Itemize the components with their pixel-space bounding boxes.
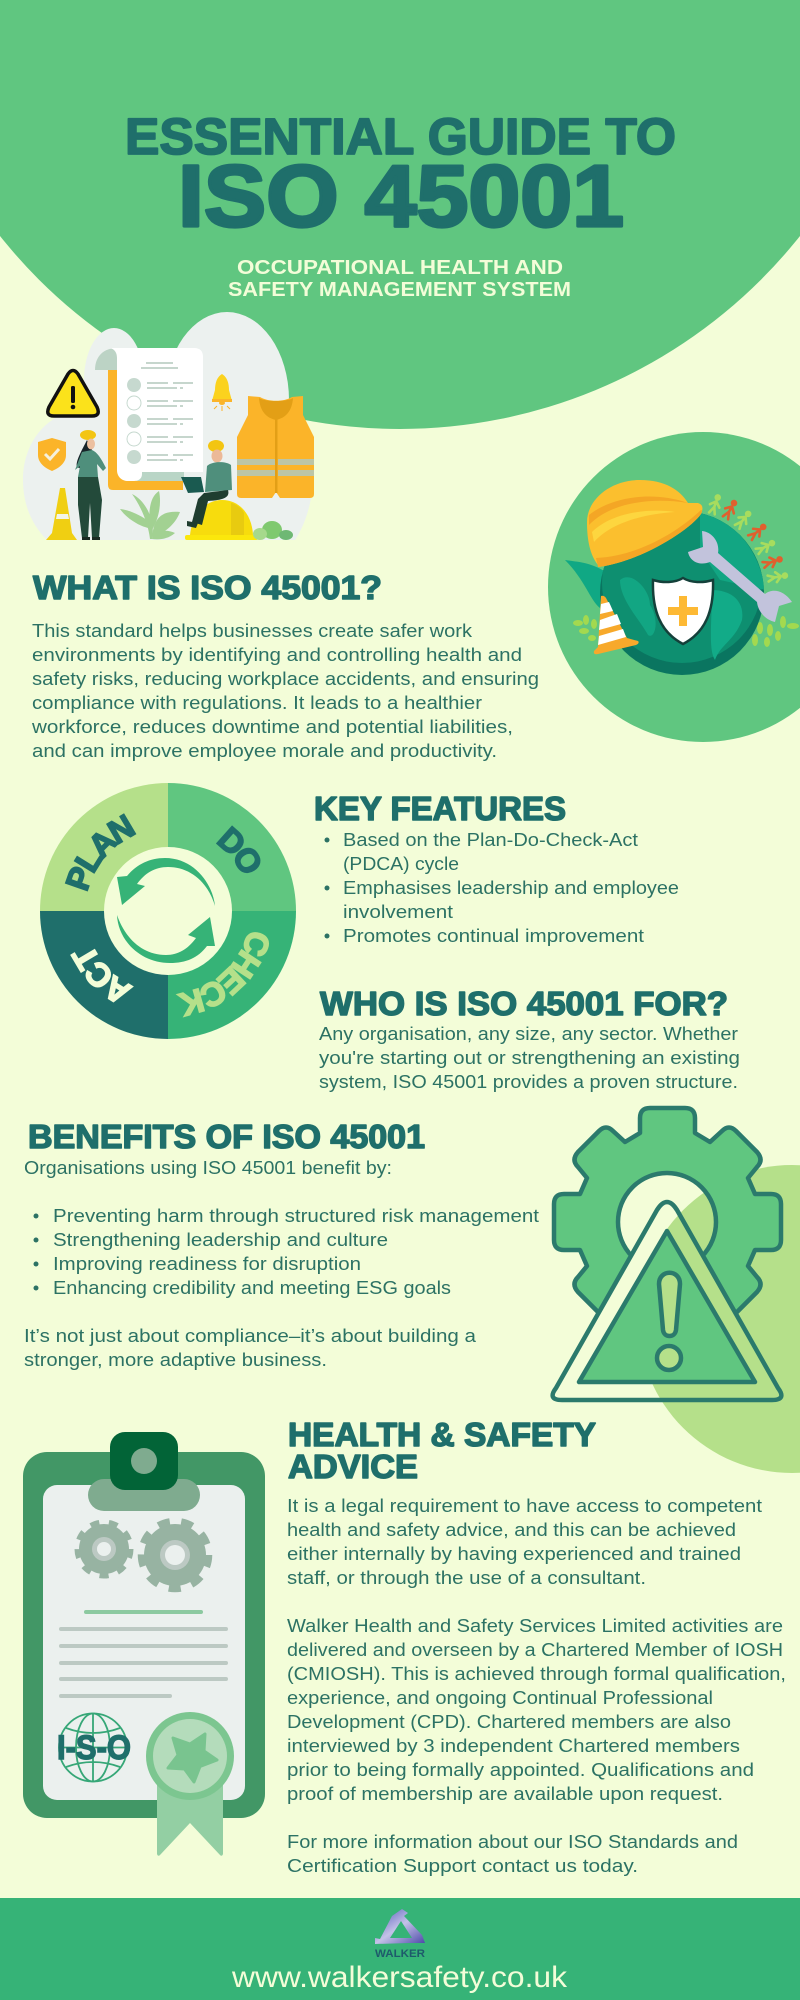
heading: WHAT IS ISO 45001? bbox=[33, 569, 382, 606]
heading: BENEFITS OF ISO 45001 bbox=[28, 1118, 425, 1155]
text block: legal requirement: It is a legal requirement to have access to competent bbox=[287, 1496, 762, 1516]
text block bbox=[319, 1024, 740, 1092]
illustration: safety checklist and workers bbox=[23, 312, 314, 540]
text block: Walker services: (CMIOSH). This is achieved through formal qualification, bbox=[287, 1664, 786, 1684]
bullet list: (PDCA) cycle bbox=[343, 854, 459, 874]
bullet list: Promotes continual improvement bbox=[343, 926, 644, 946]
traffic cone bbox=[46, 488, 77, 540]
warning triangle bbox=[553, 1202, 781, 1400]
label: check: CHECK bbox=[176, 932, 269, 1018]
text block: contact bbox=[287, 1832, 738, 1876]
text block: Walker services: experience, and ongoing Continual Professional bbox=[287, 1688, 713, 1708]
text block: Any organisation, any size, any sector. Whether bbox=[319, 1024, 738, 1044]
hard hat bbox=[587, 480, 702, 567]
bullet list bbox=[34, 1206, 539, 1298]
PDCA cycle wheel bbox=[40, 783, 296, 1039]
text block: and can improve employee morale and productivity. bbox=[32, 741, 497, 761]
text block: Organisations using ISO 45001 benefit by: bbox=[24, 1158, 392, 1178]
text block: Walker services: Development (CPD). Chartered members are also bbox=[287, 1712, 731, 1732]
text block: you're starting out or strengthening an existing bbox=[319, 1048, 740, 1068]
text block: Walker services: prior to being formally appointed. Qualifications and bbox=[287, 1760, 754, 1780]
text block: legal requirement bbox=[287, 1496, 762, 1588]
document lines bbox=[59, 1610, 228, 1698]
bullet list: Strengthening leadership and culture bbox=[53, 1230, 388, 1250]
big hard hat bbox=[185, 500, 258, 540]
subtitle: SAFETY MANAGEMENT SYSTEM bbox=[228, 278, 571, 301]
warning sign bbox=[48, 370, 98, 416]
logo: WALKER bbox=[375, 1948, 425, 1960]
bullet list: Based on the Plan-Do-Check-Act bbox=[343, 830, 638, 850]
label: do: DO bbox=[216, 826, 260, 874]
text block: safety risks, reducing workplace accidents, and ensuring bbox=[32, 669, 539, 689]
text block: legal requirement: staff, or through the use of a consultant. bbox=[287, 1568, 646, 1588]
bush bbox=[253, 521, 293, 540]
plant bbox=[120, 491, 180, 539]
text block: Walker services bbox=[287, 1616, 786, 1804]
shield bbox=[653, 578, 713, 644]
people ring bbox=[707, 494, 788, 583]
arrow: top bbox=[117, 858, 215, 906]
logo bbox=[375, 1909, 425, 1960]
panel: benefits bbox=[24, 1118, 539, 1370]
title bbox=[125, 108, 676, 245]
text block: environments by identifying and controlling health and bbox=[32, 645, 522, 665]
text block: compliance with regulations. It leads to a healthier bbox=[32, 693, 482, 713]
subtitle bbox=[228, 256, 571, 301]
text block: system, ISO 45001 provides a proven structure. bbox=[319, 1072, 738, 1092]
closing text bbox=[24, 1326, 477, 1370]
bell bbox=[212, 374, 232, 411]
bullet list: Improving readiness for disruption bbox=[53, 1254, 361, 1274]
arrow: bottom bbox=[117, 915, 215, 963]
bullet list: involvement bbox=[343, 902, 453, 922]
icon: gear with warning triangle bbox=[553, 1108, 781, 1400]
closing text: stronger, more adaptive business. bbox=[24, 1350, 327, 1370]
heading: WHO IS ISO 45001 FOR? bbox=[320, 985, 728, 1022]
text block: Walker services: Walker Health and Safety Services Limited activities are bbox=[287, 1616, 783, 1636]
illustration: globe with hard hat bbox=[548, 432, 800, 742]
leaves bbox=[565, 560, 799, 647]
scroll document bbox=[95, 348, 203, 490]
text block: contact: For more information about our ISO Standards and bbox=[287, 1832, 738, 1852]
text block bbox=[31, 621, 539, 761]
bullet list: Enhancing credibility and meeting ESG goals bbox=[53, 1278, 451, 1298]
bullet list: Emphasises leadership and employee bbox=[343, 878, 679, 898]
shield bbox=[38, 438, 66, 471]
globe bbox=[600, 503, 765, 675]
bullet list bbox=[324, 830, 679, 946]
safety vest bbox=[237, 396, 314, 498]
text block: workforce, reduces downtime and potential liabilities, bbox=[31, 717, 513, 737]
panel: what is ISO 45001 bbox=[31, 569, 539, 761]
traffic cone bbox=[594, 596, 639, 654]
closing text: It’s not just about compliance–it’s about building a bbox=[24, 1326, 477, 1346]
background circle: light green bbox=[638, 1165, 800, 1473]
wrench bbox=[688, 531, 792, 622]
ISO globe bbox=[57, 1713, 131, 1782]
worker: woman bbox=[75, 430, 106, 540]
label: act: ACT bbox=[70, 948, 134, 1002]
ISO globe: I-S-O bbox=[57, 1729, 131, 1767]
website url: www.walkersafety.co.uk bbox=[231, 1961, 568, 1994]
header circle bbox=[0, 0, 800, 429]
subtitle: OCCUPATIONAL HEALTH AND bbox=[237, 256, 563, 279]
text block: legal requirement: either internally by having experienced and trained bbox=[287, 1544, 741, 1564]
gears bbox=[78, 1522, 208, 1588]
title: ISO 45001 bbox=[178, 148, 624, 245]
icon: clipboard with ISO certificate bbox=[23, 1432, 265, 1856]
title: ESSENTIAL GUIDE TO bbox=[125, 108, 676, 165]
bullet list: Preventing harm through structured risk management bbox=[53, 1206, 539, 1226]
text block: This standard helps businesses create safer work bbox=[32, 621, 473, 641]
heading: ADVICE bbox=[288, 1448, 418, 1485]
text block: legal requirement: health and safety advice, and this can be achieved bbox=[287, 1520, 736, 1540]
heading: KEY FEATURES bbox=[314, 790, 566, 827]
panel: key features bbox=[314, 790, 679, 946]
heading bbox=[288, 1416, 596, 1485]
worker: man bbox=[181, 440, 232, 528]
panel: who is ISO 45001 for bbox=[319, 985, 740, 1092]
award ribbon bbox=[146, 1712, 234, 1856]
footer bbox=[0, 1898, 800, 2000]
text block: contact: Certification Support contact us today. bbox=[287, 1856, 638, 1876]
text block: Walker services: delivered and overseen by a Chartered Member of IOSH bbox=[287, 1640, 783, 1660]
text block: Walker services: proof of membership are available upon request. bbox=[287, 1784, 723, 1804]
label: plan: PLAN bbox=[64, 813, 136, 892]
text block: Walker services: interviewed by 3 independent Chartered members bbox=[287, 1736, 740, 1756]
heading: HEALTH & SAFETY bbox=[288, 1416, 596, 1453]
panel: health and safety advice bbox=[287, 1416, 786, 1876]
